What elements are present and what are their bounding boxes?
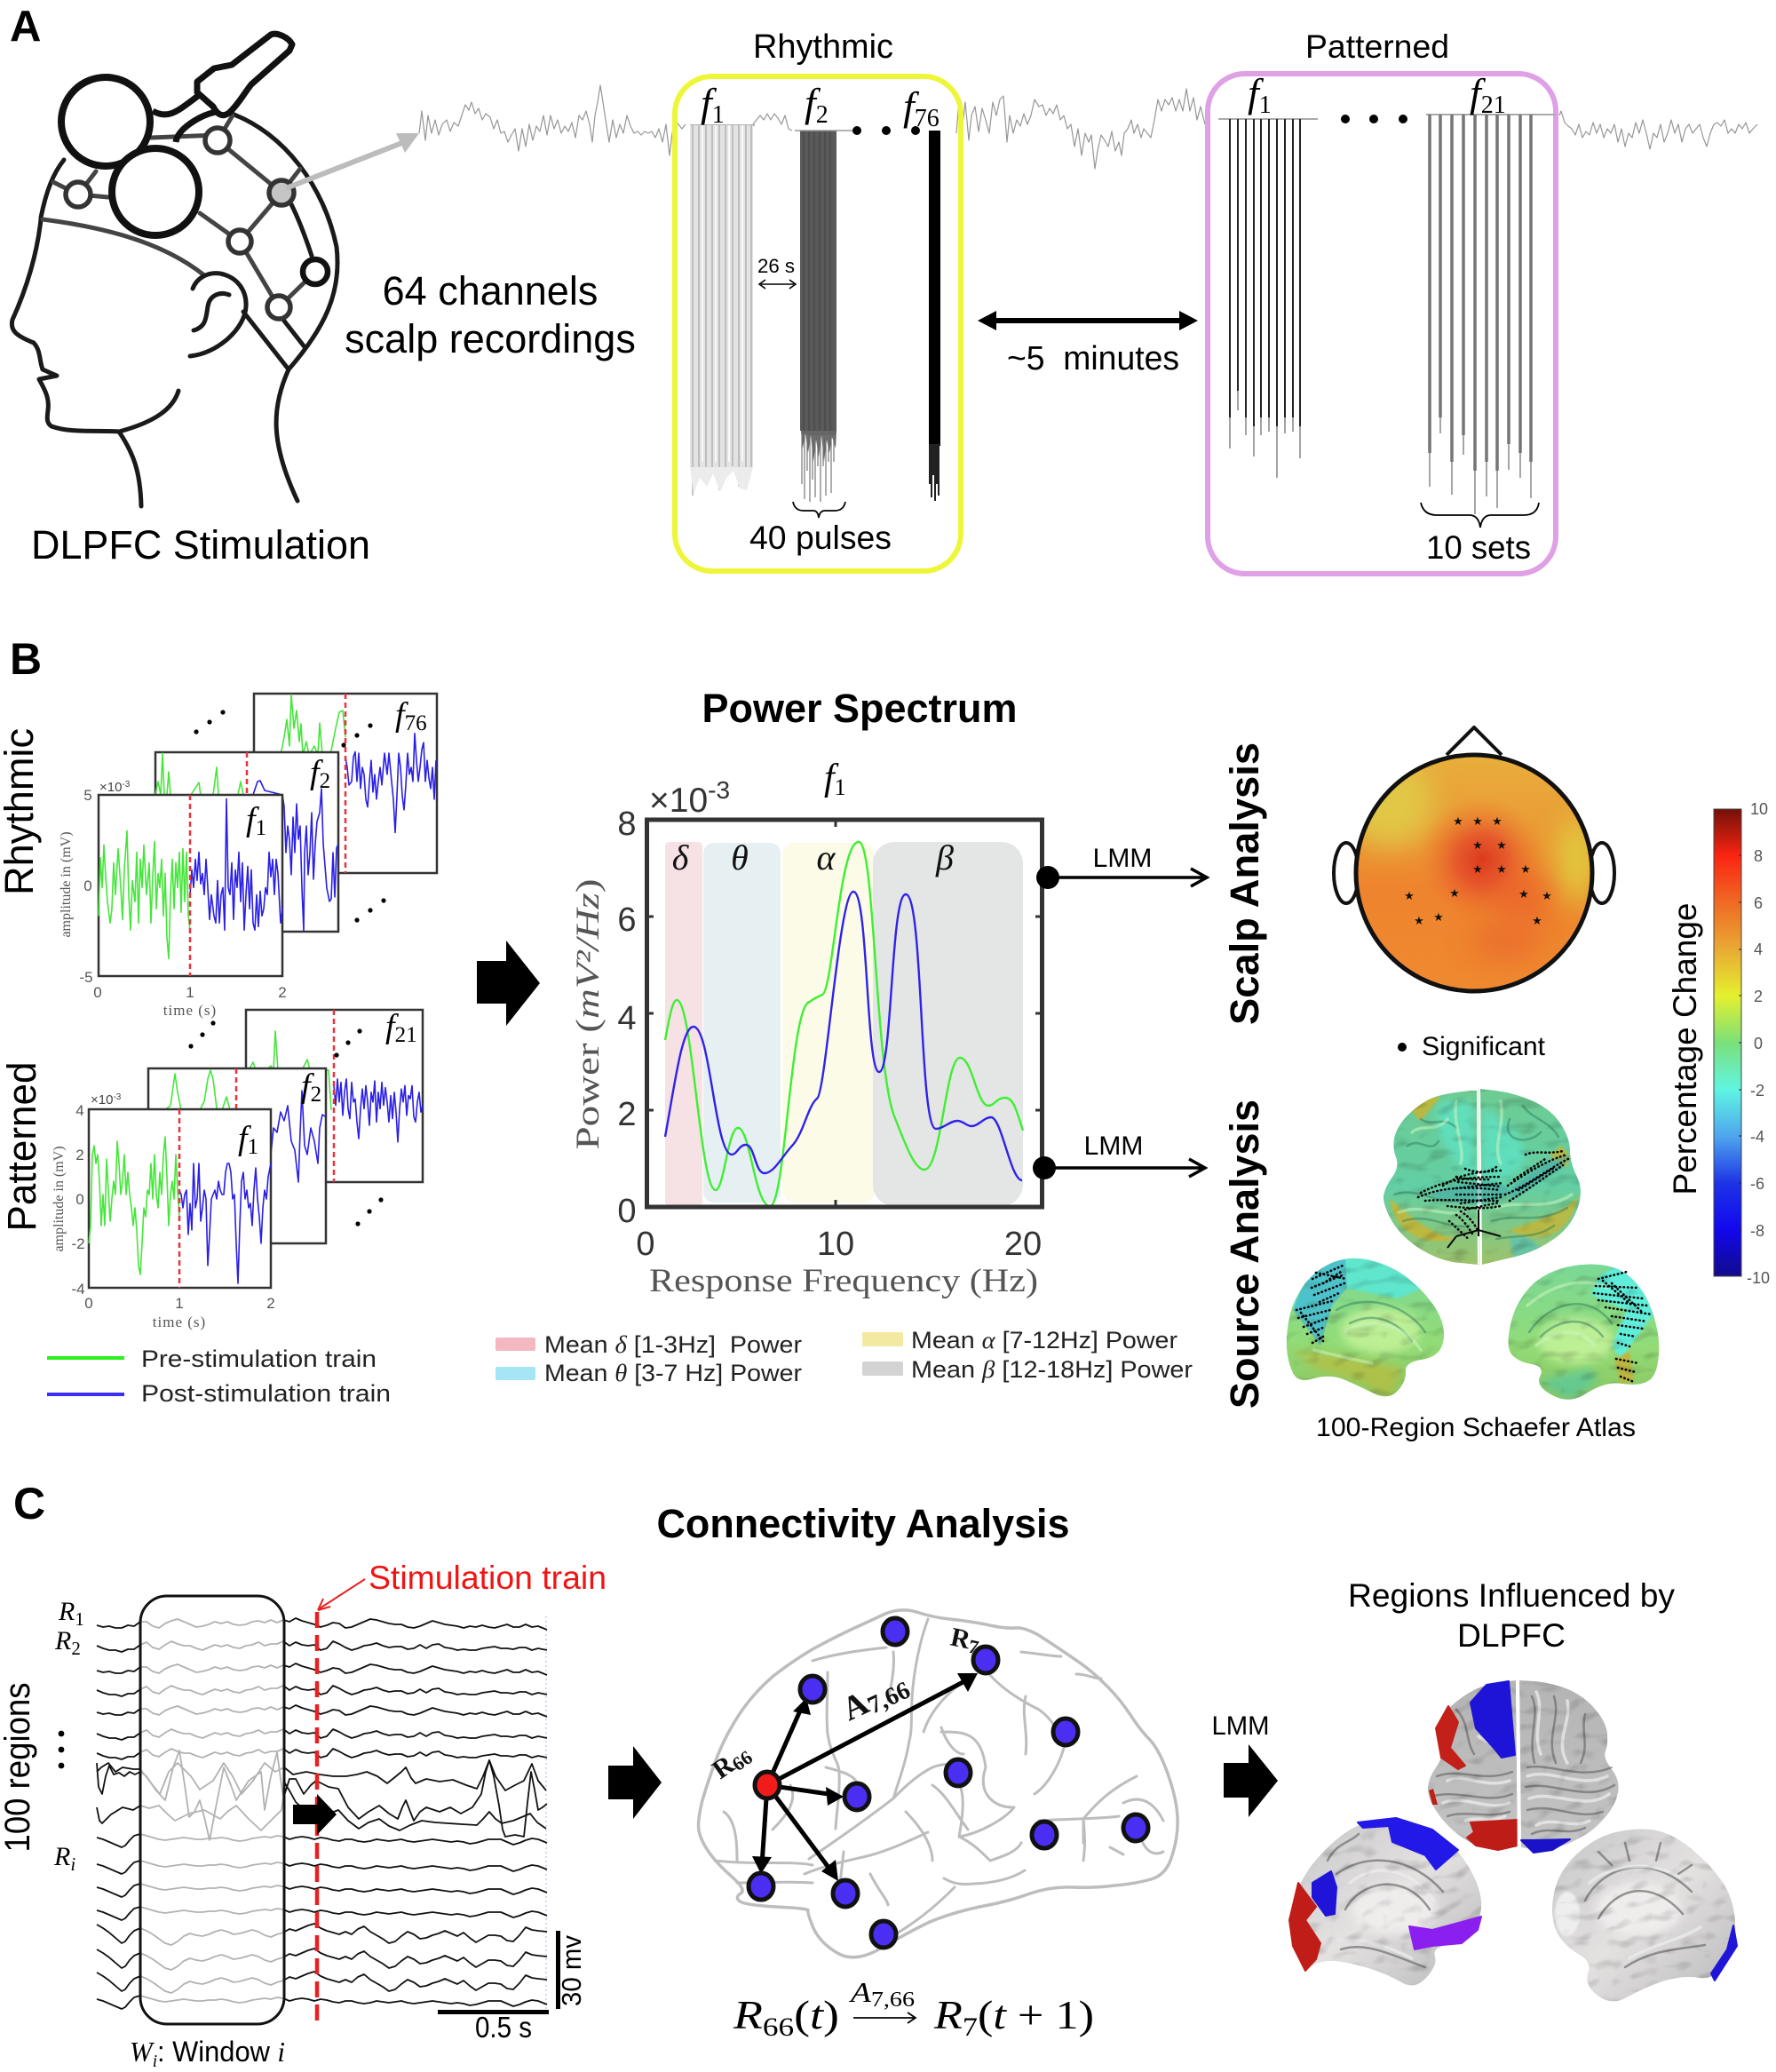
colorbar: percentage change: 10 — [1750, 800, 1768, 818]
train f76 — [903, 83, 940, 501]
colorbar: percentage change: -8 — [1750, 1222, 1764, 1240]
panel: Rhythmic box — [675, 28, 961, 571]
node labels: 7,66 — [863, 1677, 915, 1719]
sulci — [715, 1619, 1163, 1936]
y axis label: Power (mV²/Hz) — [570, 879, 607, 1149]
significant dipoles — [1594, 1272, 1652, 1382]
connector: spectrum to scalp analysis: LMM — [1093, 844, 1152, 873]
colorbar: percentage change: 0 — [1754, 1035, 1763, 1052]
y tick labels: 8 — [617, 806, 637, 843]
region labels: R — [55, 1626, 71, 1655]
frame f2 — [148, 1068, 326, 1243]
x tick labels: 10 — [817, 1226, 854, 1263]
frame f1 — [89, 1109, 271, 1288]
influenced regions — [1289, 1818, 1481, 1971]
colorbar: percentage change: 4 — [1754, 941, 1763, 958]
region nodes — [749, 1618, 1148, 1948]
train f21: f — [1470, 70, 1481, 115]
region labels: R — [59, 1597, 75, 1626]
axis labels — [52, 1092, 275, 1330]
nose and ears — [1334, 727, 1614, 903]
axis labels: amplitude in (mV) — [52, 1146, 67, 1252]
legend: frequency bands: Mean δ [1-3Hz] Power — [544, 1331, 802, 1358]
brain outline — [698, 1610, 1177, 1957]
node labels — [707, 1623, 982, 1786]
influence arrows — [752, 1673, 978, 1881]
double arrow: 5 minute gap: ~5 minutes — [1007, 340, 1179, 377]
label A: A — [10, 3, 41, 51]
ellipsis dots — [852, 126, 920, 135]
stimulation train marker: Stimulation train — [369, 1559, 607, 1596]
caption: window i: W — [130, 2036, 155, 2068]
frequency bands: β — [935, 838, 954, 877]
significance stars: ★ — [1449, 887, 1460, 901]
brace and label: 40 pulses: 40 pulses — [749, 520, 892, 556]
significance stars: ★ — [1453, 815, 1463, 829]
title f1: f — [824, 758, 835, 798]
legend: pre and post stimulation: Pre-stimulation train — [141, 1346, 377, 1372]
significance stars: ★ — [1414, 915, 1424, 928]
region labels: 1 — [75, 1608, 84, 1630]
label B: B — [10, 634, 42, 684]
y tick labels: 2 — [617, 1096, 637, 1133]
caption: window i: i — [153, 2052, 157, 2071]
frame f2 — [155, 752, 338, 932]
train f1 — [1218, 70, 1318, 478]
panel: C connectivity analysis — [0, 1479, 1737, 2071]
significance stars: ★ — [1496, 863, 1507, 877]
surface — [1290, 1819, 1481, 1986]
colorbar: percentage change: -4 — [1750, 1128, 1764, 1146]
legend: frequency bands: Mean β [12-18Hz] Power — [911, 1356, 1193, 1383]
label C: C — [13, 1479, 45, 1528]
frame f76: 76 — [405, 711, 427, 735]
train f1: 1 — [1259, 91, 1272, 119]
equation: R — [934, 1992, 959, 2037]
axis labels: 2 — [75, 1147, 84, 1163]
brace and label: 40 pulses — [749, 502, 892, 556]
axis labels: -3 — [122, 780, 131, 790]
yellow frame — [675, 76, 961, 571]
equation: 66 — [763, 2012, 794, 2042]
train f1: f — [1248, 70, 1259, 115]
arrow: channel to recording — [286, 133, 419, 188]
frame f1: 1 — [256, 816, 266, 840]
chart: scalp topography — [1334, 727, 1614, 999]
diagram: brain connectivity graph — [698, 1610, 1177, 1957]
train f76: f — [903, 83, 915, 129]
legend: pre and post stimulation: Post-stimulation train — [141, 1380, 391, 1407]
significance stars: ★ — [1433, 911, 1444, 925]
significance stars: ★ — [1472, 863, 1483, 877]
frame f1 — [99, 795, 282, 976]
axis labels: ×10 — [99, 780, 122, 795]
chart stack: patterned time series — [52, 1008, 423, 1330]
frequency bands: δ — [672, 838, 690, 877]
heading: Regions Influenced by DLPFC: Regions Influenced by — [1348, 1576, 1675, 1614]
blue spectrum curve — [665, 892, 1022, 1180]
significance stars: ★ — [1518, 888, 1529, 901]
axis labels: 1 — [186, 984, 194, 1001]
axis labels: 1 — [175, 1295, 184, 1312]
equation: ( — [794, 1992, 810, 2037]
scale bars — [438, 1931, 587, 2044]
arrow: time series to spectrum — [477, 941, 540, 1026]
exponent: ×10 — [649, 782, 708, 820]
arrow: graph to influenced regions — [1211, 1711, 1278, 1817]
panel: Patterned box — [1208, 28, 1556, 574]
brain: grey right medial view — [1552, 1830, 1737, 2002]
connector: spectrum to scalp analysis — [1036, 844, 1207, 889]
equation: ( — [978, 1992, 993, 2037]
frame f1: 1 — [248, 1135, 258, 1159]
equation: 7,66 — [871, 1989, 915, 2012]
significant dipoles — [1418, 1151, 1570, 1248]
ellipsis dots — [1341, 115, 1407, 123]
frequency bands — [665, 838, 1023, 1206]
significant dipoles — [1296, 1266, 1346, 1343]
node labels: 7 — [966, 1635, 980, 1659]
chart: regional source traces — [97, 1616, 547, 2009]
significance stars: ★ — [1520, 863, 1531, 877]
chart: power spectrum — [570, 758, 1043, 1299]
train f21 — [1426, 70, 1556, 514]
brain: left medial view — [1287, 1252, 1444, 1399]
node labels: 66 — [728, 1746, 757, 1775]
annotation: 26 s — [757, 255, 796, 289]
frequency bands: θ — [731, 838, 749, 877]
axis labels: time (s) — [163, 1002, 217, 1019]
scale bars: 30 mv — [556, 1935, 587, 2006]
colorbar: percentage change: -10 — [1747, 1269, 1770, 1287]
colorbar: percentage change: 2 — [1754, 988, 1763, 1005]
axis labels: 0 — [84, 1295, 93, 1312]
significance stars: ★ — [1532, 915, 1542, 928]
surface — [1287, 1252, 1444, 1399]
train f1: f — [701, 80, 712, 125]
axis labels: 0 — [83, 877, 92, 894]
colorbar: percentage change — [1667, 800, 1770, 1287]
vertical ellipsis — [59, 1731, 64, 1768]
frame f76: f — [395, 696, 405, 734]
icon: head with EEG cap and TMS coil — [12, 34, 337, 506]
brain: grey left medial view — [1289, 1818, 1481, 1986]
surface — [1384, 1089, 1581, 1265]
frame f21: f — [385, 1008, 395, 1045]
axis labels: 2 — [266, 1295, 275, 1312]
equation: A — [851, 1976, 868, 2008]
side label: Source Analysis: Source Analysis — [1222, 1100, 1267, 1409]
annotation: 26 s: 26 s — [757, 255, 795, 277]
x tick labels: 20 — [1004, 1226, 1042, 1263]
axis labels: 2 — [278, 984, 287, 1001]
frame f1: f — [246, 801, 256, 838]
x tick labels — [636, 1226, 1042, 1263]
equation: 7 — [963, 2012, 978, 2042]
node labels: A — [836, 1684, 875, 1728]
window highlight box — [140, 1596, 284, 2024]
pink frame — [1208, 74, 1556, 574]
significance stars — [1404, 815, 1552, 928]
side label: Patterned: Patterned — [0, 1062, 44, 1231]
caption: 64 channels scalp recordings: scalp recordings — [345, 316, 636, 361]
influenced region — [1711, 1925, 1737, 1981]
region labels: R — [54, 1842, 70, 1871]
frame f2: 2 — [311, 1083, 321, 1107]
legend: significant: Significant — [1422, 1032, 1546, 1061]
axis labels: ×10 — [91, 1092, 113, 1107]
heading: Power Spectrum: Power Spectrum — [702, 686, 1018, 731]
stimulation train marker — [317, 1559, 607, 2023]
heading: Patterned: Patterned — [1305, 28, 1449, 65]
x tick labels: 0 — [636, 1226, 655, 1263]
region labels — [53, 1597, 84, 1875]
frame f1: f — [238, 1120, 248, 1157]
axis labels: amplitude in (mV) — [59, 831, 74, 938]
double arrow: 5 minute gap — [978, 311, 1198, 377]
frame f2: f — [301, 1068, 311, 1105]
y tick labels — [617, 806, 637, 1230]
frame f21: 21 — [395, 1023, 417, 1047]
axis labels: 5 — [83, 787, 92, 804]
surface — [1428, 1680, 1619, 1850]
brace and label: 10 sets — [1421, 503, 1539, 566]
train f2: 2 — [816, 101, 829, 129]
colorbar: percentage change: -2 — [1750, 1082, 1764, 1100]
heading: Connectivity Analysis: Connectivity Analysis — [657, 1501, 1069, 1546]
train f21: 21 — [1481, 91, 1506, 119]
caption: 64 channels scalp recordings: 64 channels — [383, 268, 598, 314]
axis labels: -4 — [71, 1281, 85, 1298]
train f2: f — [805, 80, 816, 125]
heading: Regions Influenced by DLPFC: DLPFC — [1457, 1616, 1566, 1654]
chart stack: rhythmic time series — [59, 694, 437, 1019]
significance stars: ★ — [1404, 890, 1415, 903]
frame f2: 2 — [320, 769, 330, 793]
frame f76 — [254, 694, 437, 873]
axis labels: 4 — [75, 1102, 84, 1119]
legend: frequency bands: Mean α [7-12Hz] Power — [911, 1327, 1177, 1354]
region labels: i — [70, 1854, 75, 1875]
axis labels: -2 — [71, 1235, 85, 1252]
brain: grey top view with influenced regions — [1428, 1680, 1619, 1853]
caption: atlas: 100-Region Schaefer Atlas — [1316, 1413, 1636, 1442]
connector: spectrum to source analysis: LMM — [1084, 1131, 1143, 1161]
arrow: graph to influenced regions: LMM — [1211, 1711, 1270, 1741]
arrow: traces to brain graph — [608, 1746, 662, 1819]
caption: window i: i — [277, 2036, 285, 2068]
arrow: sliding window — [293, 1794, 337, 1835]
equation — [733, 1976, 1094, 2042]
axis labels: -3 — [113, 1092, 122, 1102]
train f1 — [690, 80, 755, 496]
colorbar: percentage change: -6 — [1750, 1175, 1764, 1193]
node labels: R — [948, 1623, 973, 1655]
grey EEG trace — [419, 85, 1757, 169]
ellipsis dots — [188, 1020, 384, 1227]
connector: spectrum to source analysis — [1033, 1131, 1205, 1179]
green spectrum curve — [665, 842, 1023, 1206]
node labels: R — [707, 1750, 740, 1785]
ellipsis dots — [194, 710, 386, 923]
train f1: 1 — [712, 101, 725, 129]
exponent: -3 — [708, 776, 730, 804]
scale bars: 0.5 s — [475, 2011, 532, 2044]
surface — [1508, 1264, 1659, 1401]
surface — [1552, 1830, 1735, 2002]
significance stars: ★ — [1472, 815, 1483, 829]
caption: window i: : Window — [157, 2036, 277, 2068]
caption: DLPFC Stimulation: DLPFC Stimulation — [31, 522, 370, 568]
y tick labels: 4 — [617, 1000, 637, 1037]
plot frame and ticks — [646, 820, 1043, 1207]
axis labels: 0 — [75, 1191, 84, 1208]
train f2 — [795, 80, 852, 502]
brain: right medial view — [1508, 1264, 1659, 1401]
side label: Scalp Analysis: Scalp Analysis — [1222, 742, 1267, 1025]
influenced regions — [1429, 1681, 1570, 1853]
heat map — [1359, 757, 1590, 989]
region labels: 2 — [71, 1638, 81, 1659]
legend: frequency bands: Mean θ [3-7 Hz] Power — [544, 1360, 802, 1386]
axis labels: -5 — [79, 969, 93, 986]
y tick labels: 6 — [617, 901, 637, 939]
significance stars: ★ — [1492, 815, 1502, 829]
axis labels — [59, 780, 287, 1019]
x axis label: Response Frequency (Hz) — [649, 1263, 1038, 1299]
brace and label: 10 sets: 10 sets — [1426, 529, 1531, 566]
frame f2: f — [310, 754, 320, 791]
significance stars: ★ — [1496, 839, 1507, 853]
panel: A stimulation protocol — [10, 3, 1757, 574]
equation: R — [733, 1992, 758, 2037]
colorbar: percentage change: 8 — [1754, 847, 1763, 865]
y tick labels: 0 — [617, 1193, 637, 1230]
equation: t + 1) — [993, 1992, 1083, 2037]
axis labels: 0 — [93, 984, 102, 1001]
legend: frequency bands — [496, 1327, 1193, 1386]
frequency bands: α — [817, 838, 836, 877]
heading: Rhythmic: Rhythmic — [753, 28, 893, 66]
significance stars: ★ — [1472, 839, 1483, 853]
axis labels: time (s) — [153, 1314, 206, 1330]
colorbar: percentage change: 6 — [1754, 894, 1763, 912]
title f1: 1 — [835, 774, 846, 800]
significance stars: ★ — [1542, 890, 1552, 903]
colorbar: percentage change: Percentage Change — [1667, 902, 1703, 1195]
brain: top view with source significance — [1384, 1089, 1581, 1266]
legend: pre and post stimulation — [47, 1346, 391, 1407]
frame f21 — [246, 1008, 423, 1182]
panel: B power analysis — [0, 634, 1770, 1442]
equation: t) — [810, 1992, 836, 2037]
train f76: 76 — [915, 105, 940, 132]
